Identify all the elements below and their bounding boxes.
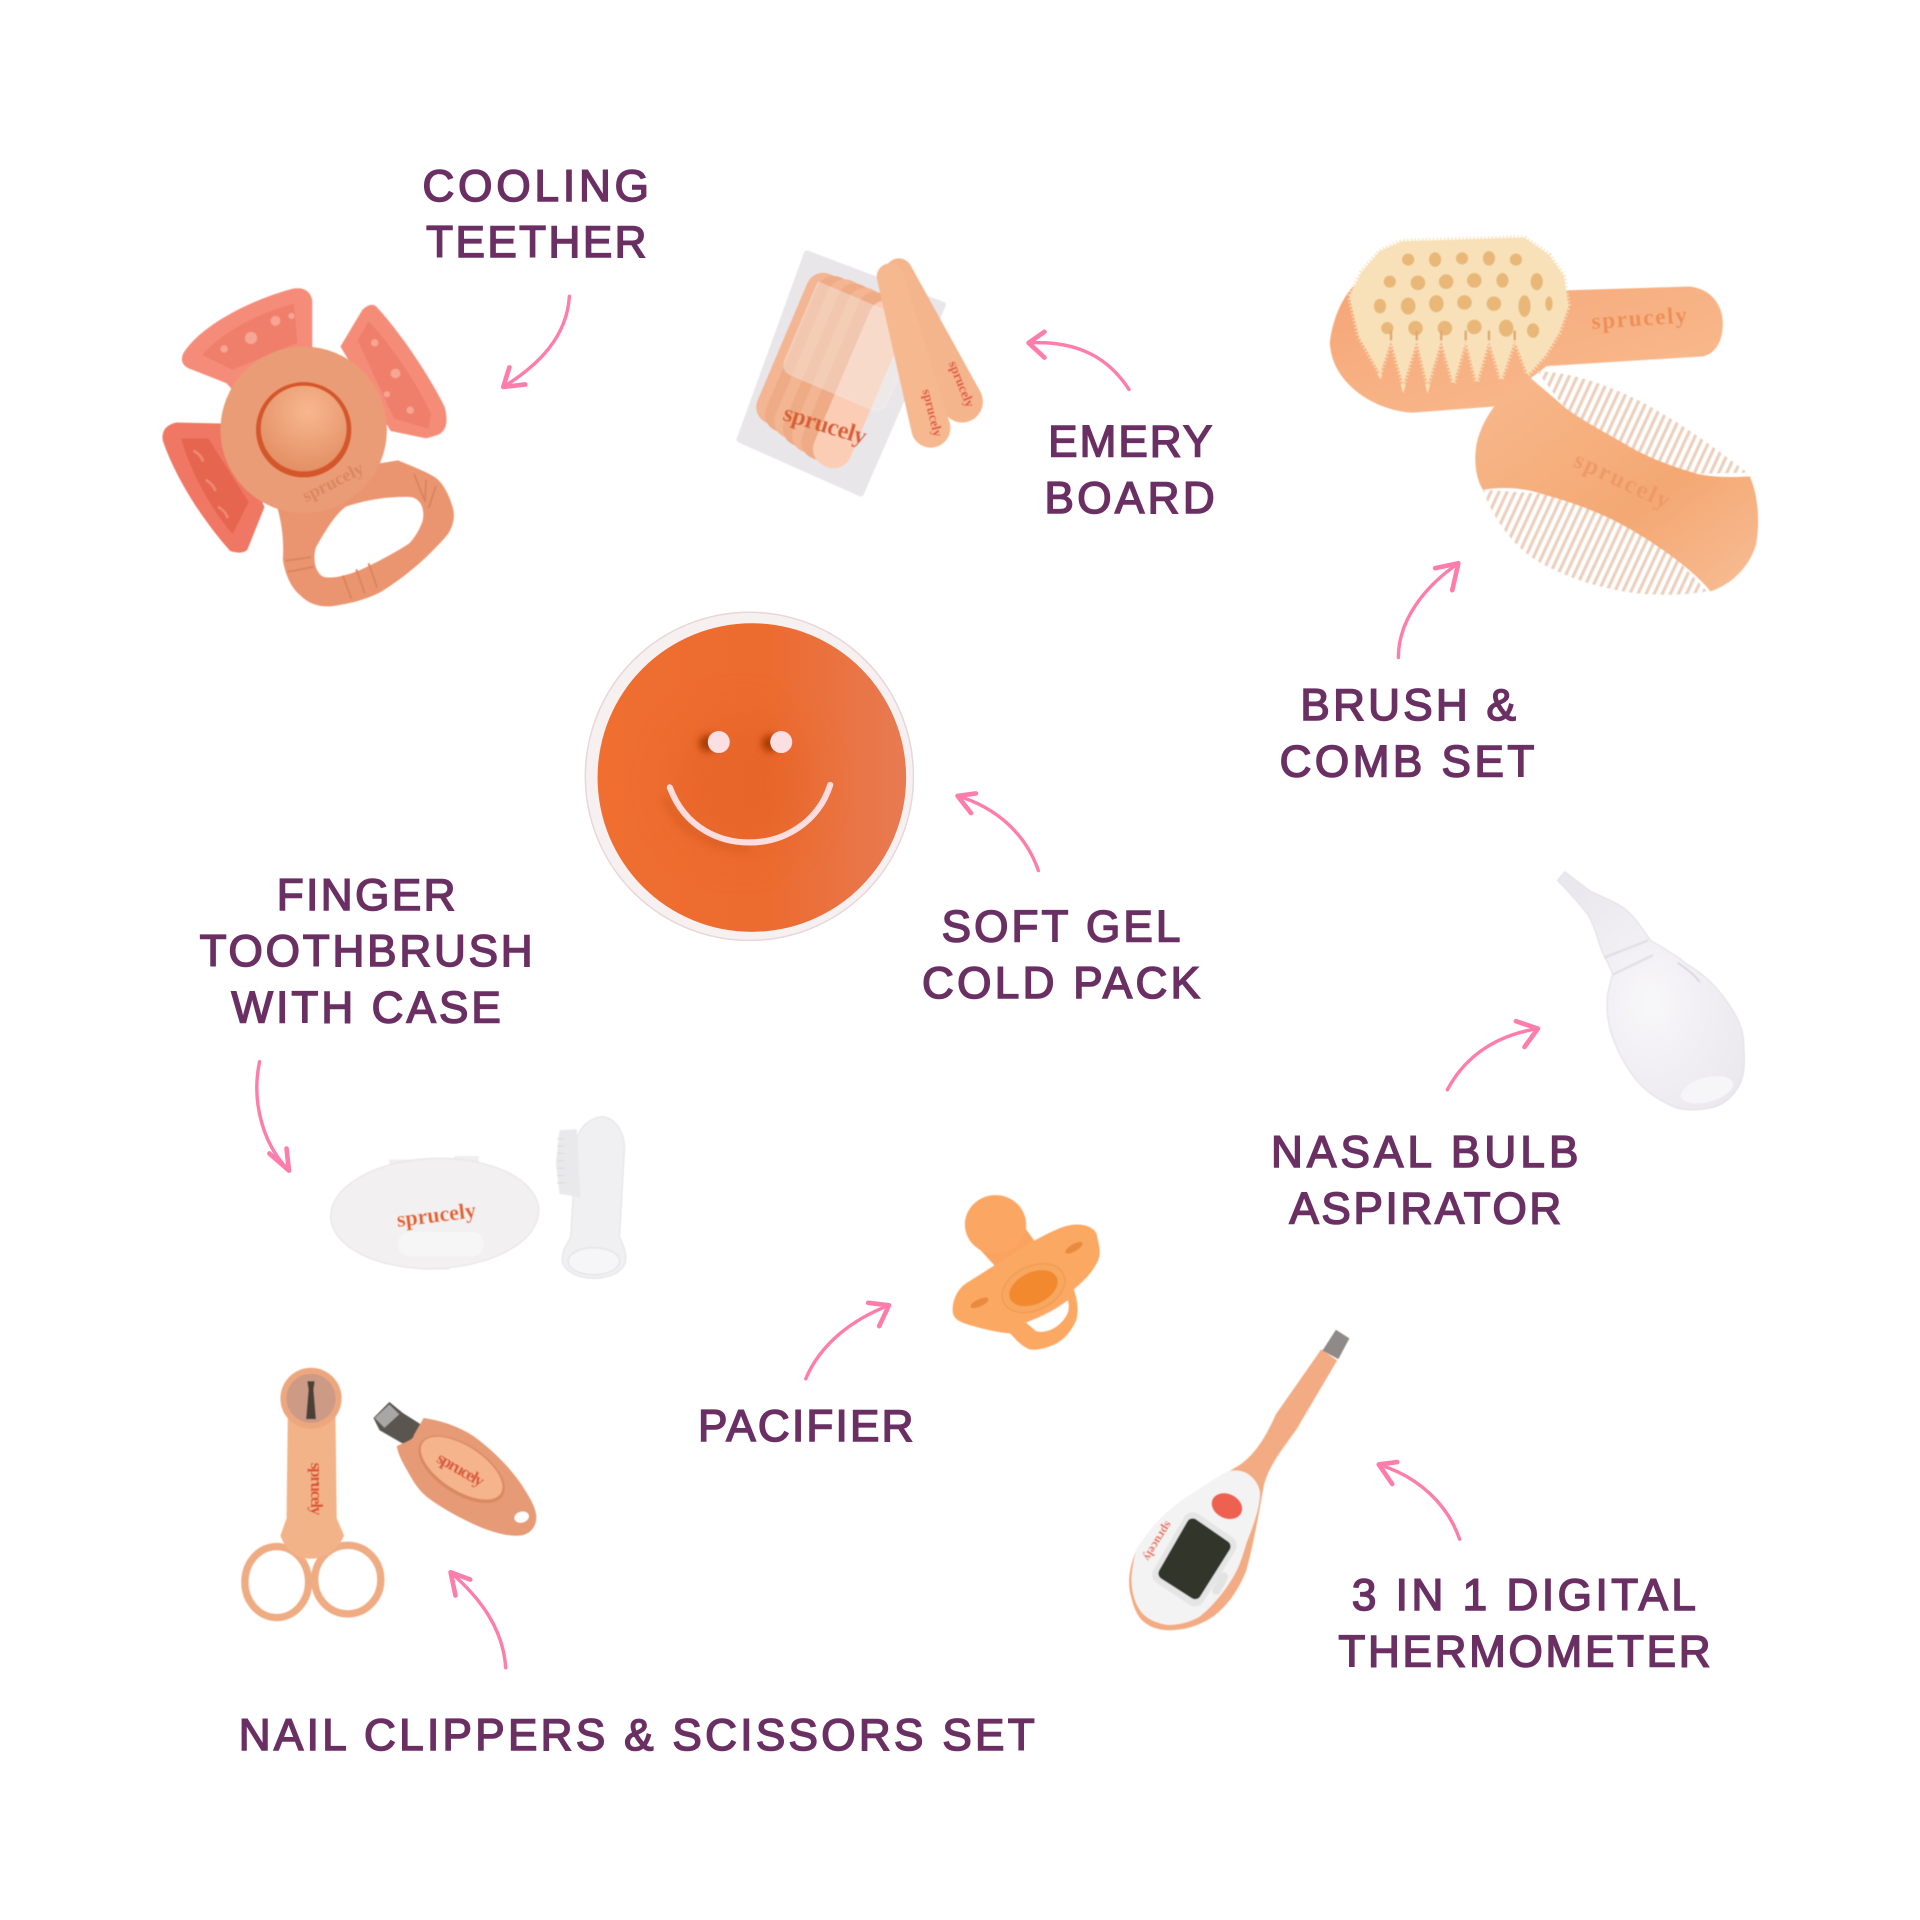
label: digital thermometer: 3 IN 1 DIGITAL: [1352, 1571, 1696, 1620]
label: cooling teether: TEETHER: [426, 218, 647, 267]
label: nail clippers and scissors set: NAIL CLIPPERS & SCISSORS SET: [239, 1711, 1035, 1760]
icon: cooling teether: sprucely: [299, 458, 367, 506]
icon: brush and comb set: sprucely: [1591, 302, 1688, 335]
arrow: digital thermometer: [1379, 1462, 1460, 1539]
icon: digital thermometer: [1129, 1330, 1349, 1630]
icon: emery board: [740, 251, 990, 493]
comb body: [1475, 377, 1758, 591]
teether handle: [276, 460, 454, 606]
label: emery board: EMERY: [1048, 418, 1212, 467]
icon: cooling teether: [163, 288, 454, 606]
label: emery board: [1044, 418, 1215, 523]
label: digital thermometer: THERMOMETER: [1338, 1628, 1711, 1677]
icon: brush and comb set: sprucely: [1570, 447, 1674, 515]
icon: emery board: sprucely: [919, 387, 946, 438]
label: emery board: BOARD: [1044, 474, 1215, 523]
arrow: pacifier: [806, 1303, 889, 1379]
label: finger toothbrush with case: [200, 871, 533, 1032]
icon: brush and comb set: [1330, 238, 1758, 595]
icon: finger toothbrush and case: [329, 1117, 626, 1278]
label: nasal bulb aspirator: ASPIRATOR: [1289, 1184, 1561, 1233]
icon: finger toothbrush and case: sprucely: [395, 1197, 477, 1232]
scissors: [245, 1368, 381, 1618]
comb upper teeth: [1537, 371, 1747, 474]
nail clippers: [373, 1402, 536, 1536]
arrow: nail clippers and scissors set: [451, 1572, 506, 1668]
label: brush and comb set: COMB SET: [1280, 737, 1534, 786]
label: digital thermometer: [1338, 1571, 1711, 1677]
label: finger toothbrush with case: WITH CASE: [231, 983, 501, 1032]
icon: digital thermometer: sprucely: [1140, 1519, 1176, 1564]
nail clippers: sprucely: [434, 1448, 488, 1491]
arrow: cooling teether: [503, 296, 569, 387]
icon: scissors and nail clippers: [245, 1368, 536, 1618]
icon: emery board: sprucely: [780, 400, 870, 451]
icon: soft gel cold pack: [585, 612, 913, 940]
arrow: finger toothbrush with case: [257, 1062, 289, 1171]
scissors: sprucely: [307, 1463, 326, 1516]
label: cooling teether: COOLING: [422, 162, 649, 211]
icon: nasal bulb aspirator: [1558, 872, 1744, 1110]
bristles: [1349, 238, 1569, 384]
comb lower teeth: [1483, 490, 1707, 595]
label: pacifier: PACIFIER: [698, 1402, 913, 1451]
label: brush and comb set: BRUSH &: [1300, 681, 1516, 730]
label: soft gel cold pack: [922, 903, 1200, 1008]
arrow: brush and comb set: [1398, 563, 1458, 658]
arrow: emery board: [1029, 332, 1129, 389]
icon: emery board: sprucely: [946, 359, 978, 410]
label: cooling teether: [422, 162, 649, 267]
label: nasal bulb aspirator: NASAL BULB: [1271, 1128, 1578, 1177]
icon: pacifier: [953, 1195, 1100, 1350]
arrow: soft gel cold pack: [958, 793, 1038, 871]
label: soft gel cold pack: SOFT GEL: [942, 903, 1180, 952]
label: finger toothbrush with case: FINGER: [277, 871, 456, 920]
arrow: nasal bulb aspirator: [1447, 1021, 1538, 1090]
label: soft gel cold pack: COLD PACK: [922, 959, 1200, 1008]
brush handle and head: [1330, 287, 1723, 413]
label: brush and comb set: [1280, 681, 1534, 786]
label: nasal bulb aspirator: [1271, 1128, 1578, 1233]
label: finger toothbrush with case: TOOTHBRUSH: [200, 927, 533, 976]
